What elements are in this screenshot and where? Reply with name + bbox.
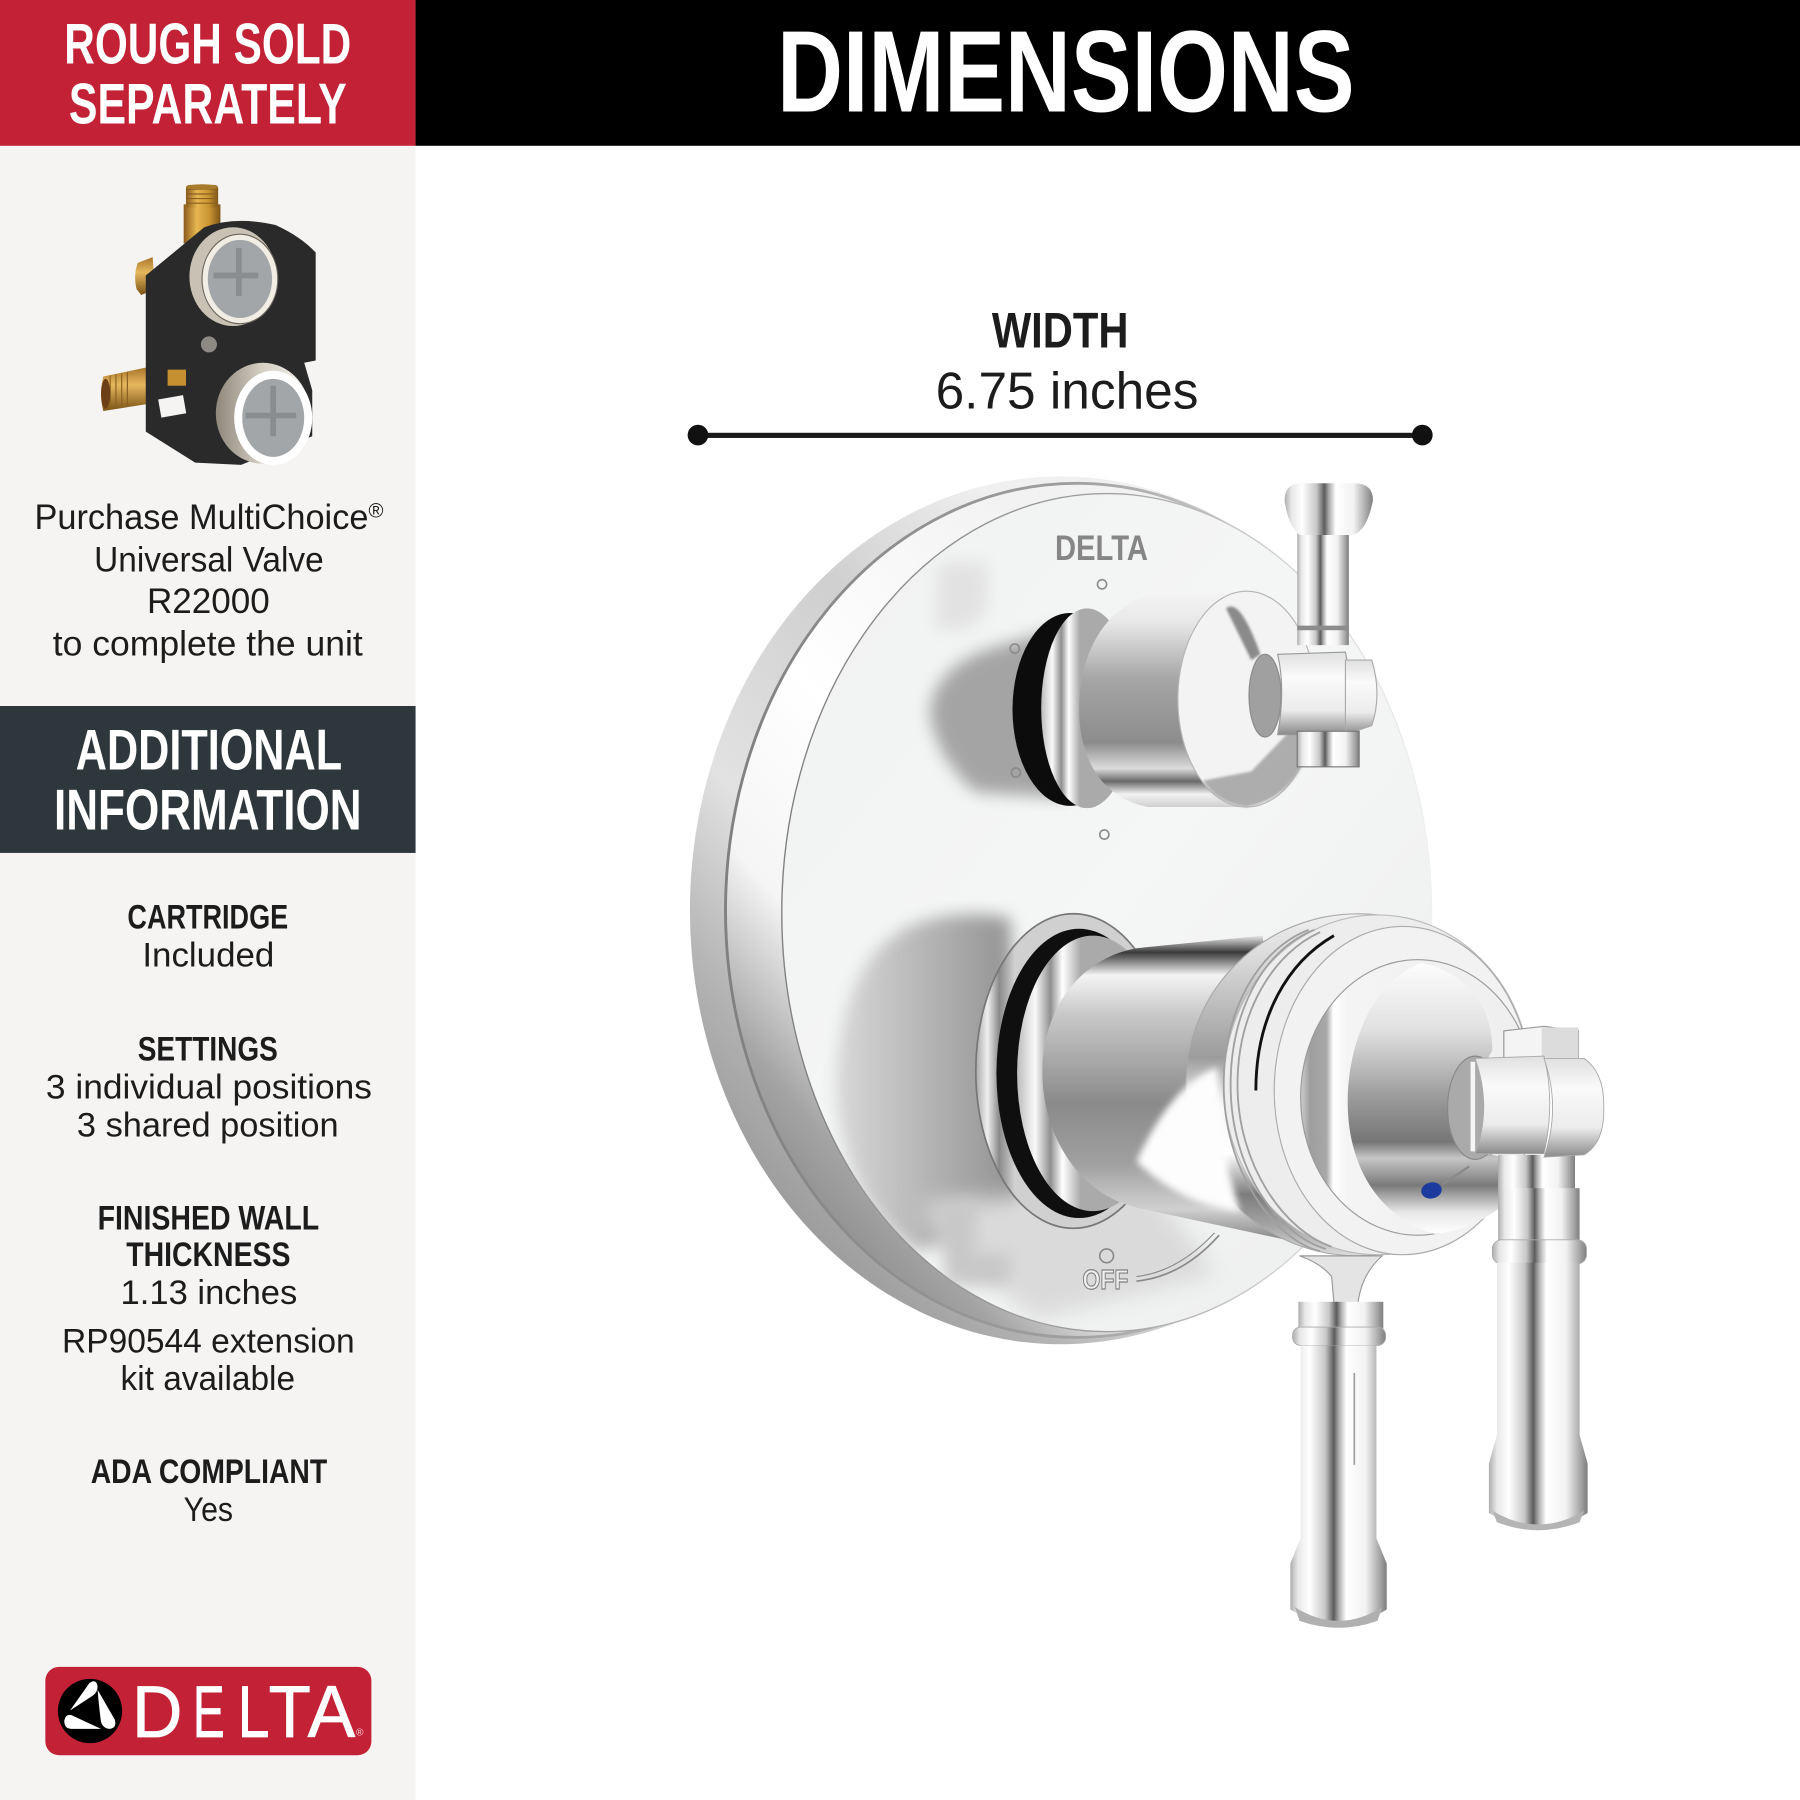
spec: finished wall thickness: RP90544 extension [62, 1322, 355, 1360]
text block: purchase note: Universal Valve [94, 541, 324, 580]
spec: ada compliant: Yes [184, 1491, 233, 1529]
text block: purchase note: R22000 [147, 582, 270, 621]
heading text: additional information: ADDITIONAL [76, 719, 342, 783]
spec: finished wall thickness: FINISHED WALL [98, 1199, 319, 1237]
spec: finished wall thickness: THICKNESS [126, 1236, 290, 1274]
text block: purchase note: to complete the unit [53, 624, 363, 663]
lower knob cone [1348, 963, 1538, 1234]
text block: purchase note: Purchase MultiChoice [34, 498, 375, 537]
escutcheon plate [690, 476, 1432, 1344]
lower knob [976, 914, 1538, 1256]
spec: cartridge [127, 899, 288, 975]
dimension arrow: width line [688, 425, 1433, 445]
icon: delta emblem [58, 1679, 122, 1743]
spec: settings [46, 1031, 372, 1144]
heading text: additional information [54, 719, 362, 842]
black mounting plate [146, 221, 316, 465]
spec: finished wall thickness: kit available [121, 1360, 295, 1398]
temperature indicator [1420, 1180, 1443, 1200]
title: DIMENSIONS [777, 6, 1355, 136]
heading text: rough sold separately: ROUGH SOLD [64, 13, 351, 77]
product: shower trim [690, 476, 1604, 1628]
upper port [189, 227, 278, 326]
header: dimensions [416, 0, 1800, 146]
lower port [216, 363, 312, 465]
icon: rough-in valve [101, 184, 316, 465]
off marking: OFF [1083, 1264, 1128, 1295]
header: rough sold separately [0, 0, 416, 146]
heading: width: WIDTH [992, 301, 1128, 358]
logo wordmark: D [132, 1671, 182, 1753]
top brass pipe [184, 184, 220, 243]
upper knob [1012, 483, 1377, 808]
lower lever [1290, 1256, 1387, 1628]
lever hub [1448, 1026, 1604, 1159]
heading text: rough sold separately: SEPARATELY [69, 72, 347, 136]
text block: purchase note: ® [368, 500, 383, 523]
upper knob end cap [1178, 591, 1316, 807]
upper lever [1249, 483, 1377, 767]
plate lettering: DELTA [1055, 528, 1148, 568]
text block: purchase note [34, 498, 383, 663]
spec: finished wall thickness: 1.13 inches [121, 1274, 297, 1312]
panel: left sidebar background [0, 146, 416, 1800]
mounting holes [1010, 580, 1109, 839]
spec: cartridge: CARTRIDGE [127, 899, 288, 937]
rear lever [1489, 1155, 1588, 1530]
spec: ada compliant [91, 1453, 327, 1529]
logo wordmark: A [308, 1671, 356, 1753]
off marking [1083, 1233, 1219, 1295]
spec: ada compliant: ADA COMPLIANT [91, 1453, 327, 1491]
logo: delta [45, 1667, 371, 1755]
header: additional information [0, 706, 416, 853]
plate reflections [836, 562, 1217, 1320]
logo wordmark [132, 1670, 364, 1753]
screw [201, 336, 217, 352]
logo wordmark: ® [356, 1728, 364, 1739]
lower knob flange [1186, 914, 1530, 1256]
upper left brass pipe [135, 257, 155, 295]
heading text: additional information: INFORMATION [54, 778, 362, 842]
heading text: rough sold separately [64, 13, 351, 136]
logo wordmark: T [269, 1671, 311, 1753]
lower left brass pipe [101, 367, 147, 411]
logo wordmark: E [193, 1672, 225, 1753]
spec: finished wall thickness [62, 1199, 355, 1398]
spec: settings: SETTINGS [138, 1031, 278, 1069]
spec: settings: 3 shared position [77, 1106, 339, 1144]
label: width value: 6.75 inches [936, 362, 1198, 420]
spec: cartridge: Included [142, 937, 274, 975]
logo wordmark: L [238, 1670, 269, 1752]
spec: settings: 3 individual positions [46, 1069, 372, 1107]
